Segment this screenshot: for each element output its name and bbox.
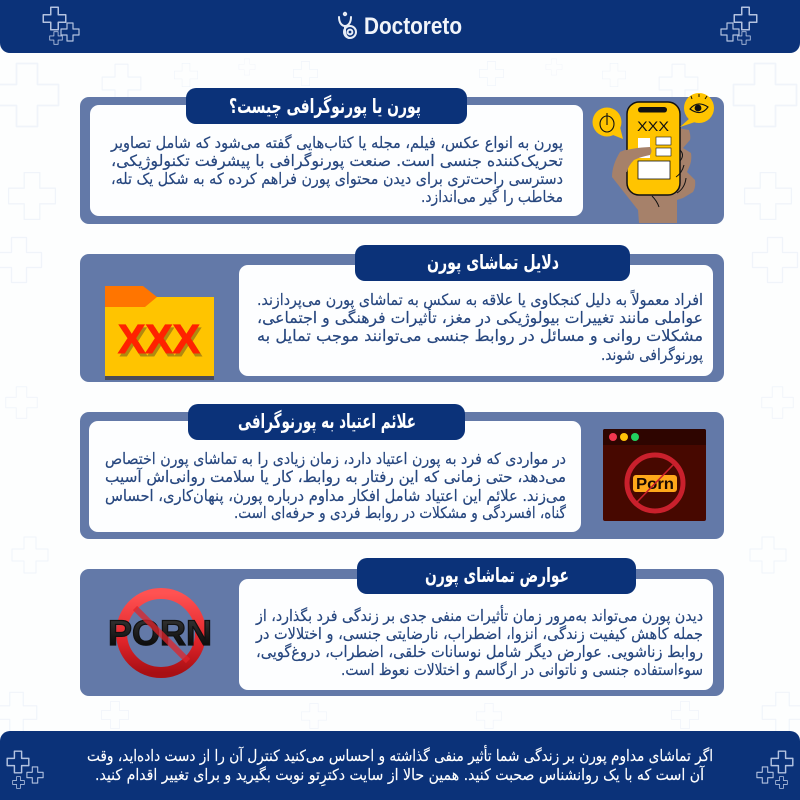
text block: می‌دهد، حتی زمانی که این رفتار به روابط، کار یا سلامت روانی‌اش آسیب: [105, 467, 566, 487]
footer text: [87, 745, 713, 787]
heading: پورن یا پورنوگرافی چیست؟: [229, 94, 421, 119]
text block: عواملی مانند تغییرات بیولوژیکی در مغز، تأثیرات فرهنگی و اجتماعی،: [257, 307, 703, 328]
icon: blocked browser window: [603, 429, 706, 521]
heading: [188, 404, 465, 440]
icon: xxx folder: [105, 286, 214, 380]
footer text: آن است که با یک روانشناس صحبت کنید. همین حالا از سایت دکترِتو نوبت بگیرید و برای تغییر اقدام کنید.: [95, 765, 705, 787]
text block: دسترسی راحت‌تری برای دیدن محتوای پورن فراهم کرده که به شکل یک تله،: [111, 170, 563, 189]
text block: [255, 605, 703, 680]
heading: علائم اعتیاد به پورنوگرافی: [238, 409, 416, 434]
icon: header crosses left: [43, 7, 79, 44]
heading: دلایل تماشای پورن: [427, 250, 559, 275]
text block: گناه، افسردگی و مشکلات در روابط فردی و حرفه‌ای است.: [234, 504, 567, 523]
footer bar: [0, 731, 800, 800]
heading: [355, 245, 630, 281]
text block: می‌زند. علائم این اعتیاد شامل افکار مداوم درباره پورن، پنهان‌کاری، احساس: [105, 487, 566, 506]
icon: no porn sign: PORN: [108, 614, 212, 653]
icon: xxx folder: XXX: [118, 316, 200, 362]
text block: دیدن پورن می‌تواند به‌مرور زمان تأثیرات منفی جدی بر زندگی فرد بگذارد، از: [255, 605, 703, 626]
panel: what is porn: [80, 88, 724, 224]
text block: پورن به انواع عکس، فیلم، مجله یا کتاب‌هایی گفته می‌شود که شامل تصاویر: [110, 134, 563, 153]
text block: [110, 134, 563, 206]
icon: xxx folder: XXX: [120, 319, 202, 365]
icon: footer crosses left: [7, 751, 43, 788]
panel: reasons for watching: [80, 245, 724, 382]
text block: [257, 290, 703, 365]
icon: hand holding phone: [592, 93, 714, 223]
text block: [105, 450, 567, 523]
text block: مشکلات روانی و مسائل در روابط جنسی می‌توانند موجب تمایل به: [257, 327, 703, 346]
text block: سوءاستفاده جنسی و ناتوانی در ارگاسم و اختلالات نعوظ است.: [341, 661, 703, 680]
text block: مخاطب را گیر می‌اندازد.: [421, 188, 563, 206]
panel: side effects: [80, 558, 724, 696]
panel: signs of addiction: [80, 404, 724, 539]
icon: speech bubble eye: [680, 93, 714, 127]
text block: تحریک‌کننده جنسی است. صنعت پورنوگرافی با پیشرفت تکنولوژیکی،: [111, 152, 563, 171]
footer text: اگر تماشای مداوم پورن بر زندگی شما تأثیر منفی گذاشته و احساس می‌کنید کنترل آن را از دست داده‌اید، وقت: [87, 745, 713, 766]
text block: افراد معمولاً به دلیل کنجکاوی یا علاقه به سکس به تماشای پورن می‌پردازند.: [257, 290, 703, 310]
heading: [357, 558, 636, 594]
icon: blocked browser window: Porn: [636, 476, 674, 493]
heading: [186, 88, 467, 124]
icon: footer crosses right: [757, 751, 793, 788]
icon: hand holding phone: XXX: [637, 118, 670, 134]
text block: جمله کاهش کیفیت زندگی، انزوا، اضطراب، نارضایتی جنسی، و اختلالات در: [255, 625, 703, 644]
heading: عوارض تماشای پورن: [425, 563, 569, 588]
icon: header crosses right: [721, 7, 757, 44]
header bar: [0, 0, 800, 53]
text block: در مواردی که فرد به پورن اعتیاد دارد، زمان زیادی را به تماشای پورن اختصاص: [105, 450, 566, 469]
icon: no porn sign: [108, 594, 212, 672]
logo: Doctoreto: [364, 13, 462, 40]
icon: speech bubble apple: [592, 108, 623, 139]
text block: روابط زناشویی. عوارض دیگر شامل نوسانات خلقی، اضطراب، دروغ‌گویی،: [256, 643, 703, 662]
text block: پورنوگرافی شوند.: [601, 346, 703, 365]
